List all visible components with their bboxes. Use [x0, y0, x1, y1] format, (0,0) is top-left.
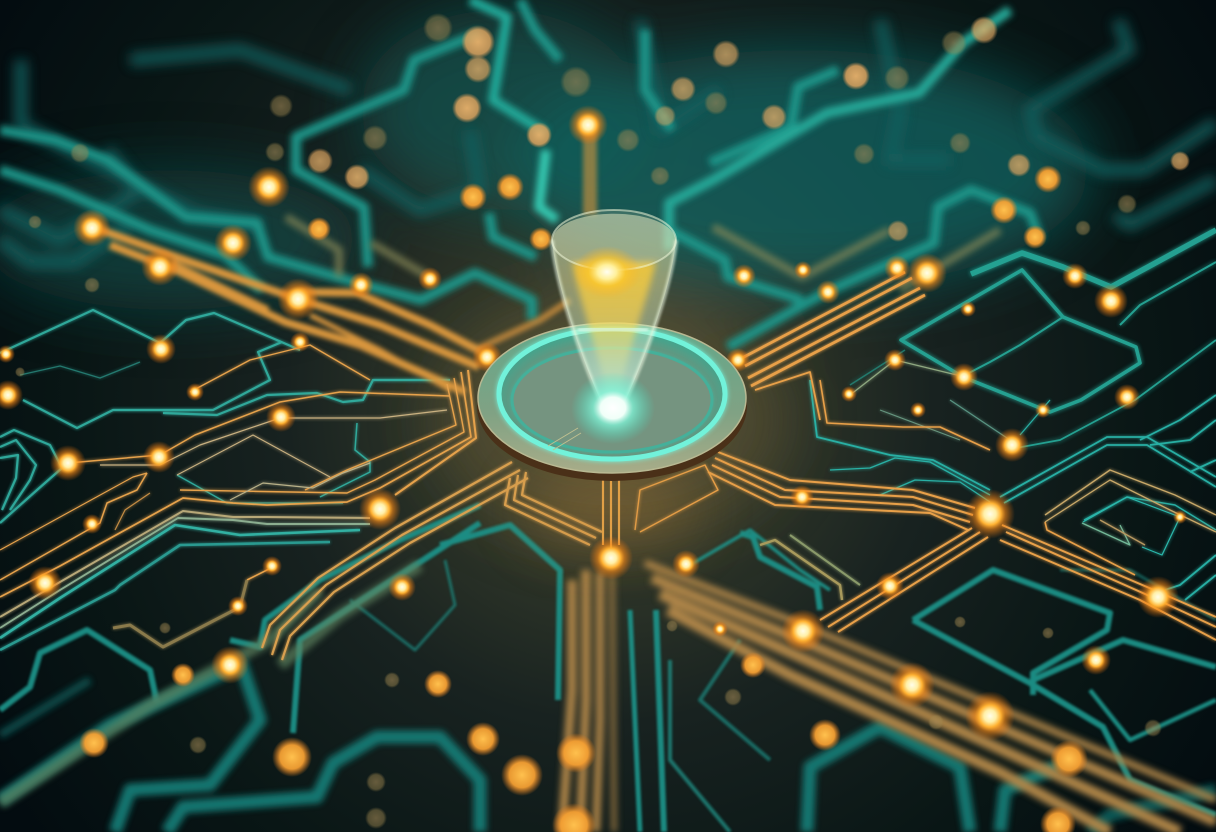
traces: orange upper-left bundle: [95, 130, 590, 392]
bright glowing circuit nodes: [0, 105, 1187, 741]
central core glow: [571, 372, 655, 444]
disc base: [478, 323, 746, 473]
traces: teal right diamond and edges: [850, 230, 1216, 450]
cone inner yellow light: [573, 246, 641, 298]
traces: orange central vertical bus: [603, 478, 619, 548]
warm glow below disc: [522, 470, 702, 550]
traces: blurred teal upper field: [0, 0, 1040, 347]
traces: orange diagonal to lower left: [262, 462, 602, 660]
traces: teal left middle: [0, 310, 450, 523]
cone outline: [552, 240, 676, 408]
cone core light: [572, 262, 656, 395]
traces: blurred teal foreground: [0, 660, 1216, 832]
traces: dotted vertical beam: [605, 20, 607, 210]
disc scratch lines: [548, 428, 581, 450]
traces: blurred tan lower-left diagonal: [0, 565, 420, 803]
traces: blurred tan upper field: [286, 217, 1000, 290]
traces: mixed teal and tan left multi-line bus: [0, 511, 370, 650]
disc teal ring: [499, 329, 725, 459]
traces: thick teal lower field: [0, 505, 1216, 832]
teal haze at top of board: [0, 10, 1090, 540]
traces: orange right bundle: [635, 272, 1216, 640]
traces: wide orange foreground bundles: [562, 563, 1216, 832]
traces: distant faint teal: [0, 20, 1216, 262]
central disc: [477, 323, 747, 481]
traces: orange left bundle: [0, 345, 476, 647]
bokeh dots: saturated orange lights: [79, 165, 1088, 832]
disc shadow: [477, 331, 747, 481]
holographic cone: [552, 210, 676, 408]
traces: teal right middle bundle: [810, 380, 1216, 600]
cone ring band: [578, 328, 648, 331]
cone rim: [552, 210, 676, 270]
disc inner ring: [512, 348, 712, 452]
bokeh dots: tan upper lights: [307, 16, 1190, 242]
